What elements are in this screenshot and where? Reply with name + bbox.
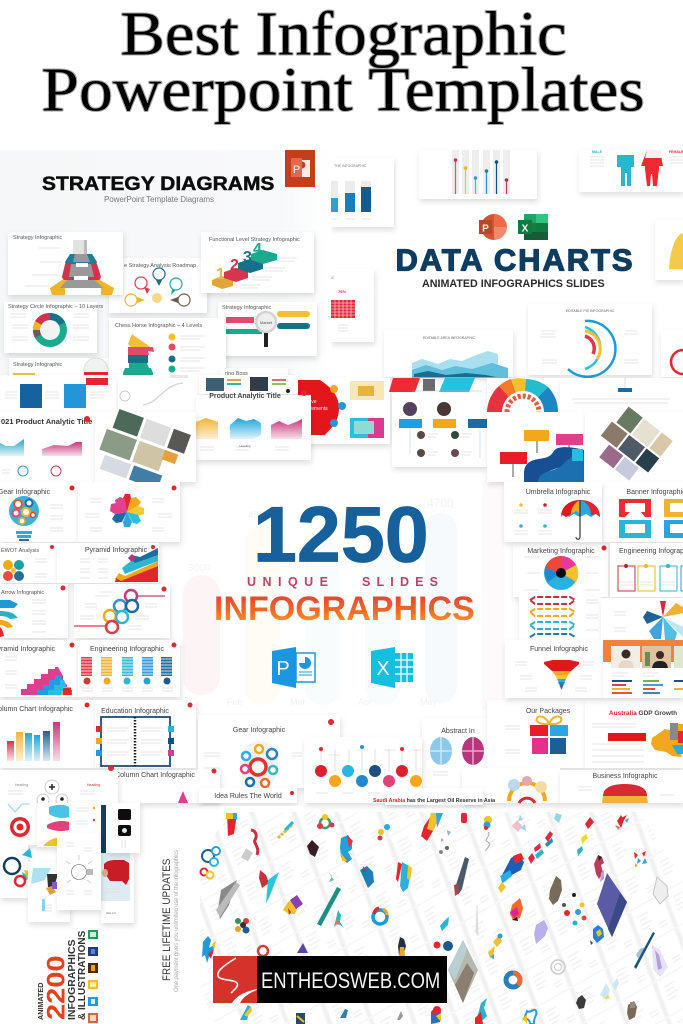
icon: powerpoint blue: P bbox=[276, 658, 290, 680]
card: petal wheel right bbox=[601, 598, 683, 640]
icon: excel blue bbox=[371, 647, 413, 688]
card: functional strategy steps bbox=[201, 232, 314, 293]
card: diamonds chain bbox=[519, 597, 601, 640]
card: red circle with photos bbox=[298, 378, 475, 444]
card: product analytic title bbox=[196, 390, 311, 460]
subheading: animated infographics slides: ANIMATED INFOGRAPHICS SLIDES bbox=[422, 278, 605, 290]
card: product analytic title: Product Analytic Title bbox=[209, 393, 281, 400]
card: coloured drops bbox=[37, 803, 72, 847]
card: bottom left cross: Heading bbox=[87, 783, 100, 787]
card: small legend bbox=[72, 803, 106, 833]
card: gear infographic head: Gear Infographic bbox=[233, 727, 286, 734]
subheading: unique slides: UNIQUE bbox=[247, 575, 328, 589]
card: functional strategy steps: 3 bbox=[243, 249, 252, 266]
card: column chart infographic bbox=[0, 700, 95, 768]
card: strategy pyramid: Strategy Infographic bbox=[13, 235, 62, 241]
card: funnel infographic: Funnel Infographic bbox=[530, 646, 588, 653]
card: saudi arabia oil reserve bbox=[373, 788, 495, 805]
heading: 1250: 1250 bbox=[253, 490, 429, 578]
watermark banner: entheosweb.com bbox=[213, 956, 447, 1003]
card: red pictogram grid: IC bbox=[331, 276, 335, 280]
card: area chart bbox=[384, 330, 513, 378]
card: bottom left cross: Heading bbox=[15, 783, 28, 787]
card: target bbox=[0, 803, 37, 845]
card: team photos bbox=[603, 640, 683, 698]
card: education notebook bbox=[95, 700, 196, 768]
icon: powerpoint square: P bbox=[293, 164, 300, 176]
text: one payment note rotated: One payment gives you unlimited use of the infographics bbox=[174, 850, 180, 992]
text: 2200 rotated: 2200 bbox=[41, 955, 70, 1020]
subheading: powerpoint template diagrams: PowerPoint Template Diagrams bbox=[104, 195, 214, 204]
card: road bbox=[487, 412, 585, 482]
icon: powerpoint circle logo: P bbox=[482, 224, 489, 234]
card: photo with red person bbox=[101, 853, 134, 923]
card: product analytic title: Heading bbox=[239, 444, 251, 448]
card: arrow infographic: Arrow Infographic bbox=[1, 590, 44, 596]
card: pyramid infographic bbox=[0, 640, 78, 697]
card: strategy circle: Strategy Circle Infographic – 10 Layers bbox=[8, 304, 103, 310]
icon: excel blue: X bbox=[376, 658, 390, 680]
title: Best Infographic bbox=[120, 0, 567, 68]
faint background bar chart: Feb bbox=[227, 697, 243, 707]
card: gear infographic head bbox=[198, 715, 340, 789]
app icons column bbox=[88, 930, 98, 1023]
card: our packages bbox=[487, 700, 585, 768]
card: puzzle arc bbox=[462, 768, 560, 803]
card: funnel infographic bbox=[505, 640, 603, 698]
heading: data charts: DATA CHARTS bbox=[396, 242, 632, 278]
card: arrow infographic bbox=[0, 584, 68, 638]
card: product title fragment bbox=[220, 368, 288, 378]
card: australia gdp growth bbox=[585, 700, 683, 768]
card: functional strategy steps: Functional Level Strategy Infographic bbox=[209, 237, 300, 243]
card: red pictogram grid: 76% bbox=[338, 289, 346, 294]
faint background bar chart: 4700 bbox=[427, 496, 454, 510]
card: male female figures bbox=[579, 150, 683, 192]
card: lower left column chart fragment: Column Chart Infographic bbox=[115, 772, 195, 779]
card: photos strip bbox=[199, 375, 298, 394]
card: strategy lower: Strategy Infographic bbox=[13, 362, 62, 368]
card: area chart: EDITABLE AREA INFOGRAPHIC bbox=[423, 336, 476, 340]
card: abstract infographic: Abstract In bbox=[441, 728, 475, 735]
card: business infographic: Business Infographic bbox=[593, 773, 658, 780]
card: red circle with photos: ative bbox=[306, 399, 317, 405]
icon: excel logo: X bbox=[522, 224, 529, 234]
card: donut arcs: EDITABLE PIE INFOGRAPHIC bbox=[566, 309, 615, 313]
card: petal wheel bbox=[78, 482, 180, 542]
card: chess horse bbox=[109, 318, 226, 378]
subheading: unique slides: SLIDES bbox=[362, 575, 438, 589]
card: circle chain bbox=[0, 845, 32, 898]
card: pyramid stripes: Pyramid Infographic bbox=[85, 547, 148, 554]
card: strategy roadmap bbox=[109, 258, 207, 313]
card: chess horse: Chess Horse Infographic – 4 Levels bbox=[115, 323, 202, 329]
slide thumbnails left bbox=[200, 813, 443, 1024]
card: strategy circle bbox=[4, 302, 103, 353]
card: abstract infographic bbox=[422, 718, 487, 788]
icon: powerpoint blue bbox=[272, 647, 315, 688]
card: strategy lower bbox=[9, 358, 109, 378]
card: engineering infographic springs: Engineering Infographic bbox=[90, 646, 164, 653]
card: org chart bbox=[392, 391, 487, 467]
card: lollipop chart bbox=[419, 150, 537, 199]
icon: powerpoint circle logo bbox=[479, 214, 507, 240]
card: 2021 product analytic bbox=[0, 412, 95, 482]
card: functional strategy steps: 1 bbox=[216, 266, 225, 283]
card: functional strategy steps: 2 bbox=[230, 257, 239, 274]
text: illustrations rotated: & ILLUSTRATIONS bbox=[77, 930, 88, 1020]
card: strategy magnifier: Market bbox=[260, 320, 273, 325]
card: strategy magnifier bbox=[218, 302, 317, 356]
collage: rotated photos left bbox=[93, 407, 196, 494]
heading: infographics: INFOGRAPHICS bbox=[214, 590, 475, 628]
panel: 1250 infographics collage bbox=[0, 375, 683, 806]
card: 3D column chart bbox=[331, 158, 394, 227]
card: marketing infographic bbox=[513, 543, 608, 597]
card: functional strategy steps: 4 bbox=[253, 241, 262, 258]
card: gear rainbow bbox=[487, 378, 560, 433]
card: strategy roadmap: e Strategy Analysis Roadmap bbox=[124, 263, 196, 269]
panel: strategy diagrams bbox=[0, 150, 331, 378]
card: umbrella infographic: Umbrella Infographic bbox=[526, 489, 591, 496]
card: gear infographic lightbulb bbox=[0, 482, 78, 542]
card: pyramid stripes bbox=[57, 543, 159, 583]
card: engineering infographic red-yellow tabs bbox=[610, 543, 683, 597]
card: idea rules the world: Idea Rules The World bbox=[214, 793, 282, 800]
card: swot analysis bbox=[0, 543, 57, 583]
card: engineering arrows bbox=[74, 584, 170, 638]
card: strategy pyramid bbox=[8, 232, 123, 295]
card: product title fragment: ring Boss bbox=[225, 371, 248, 377]
card: swot analysis: EWOT Analysis bbox=[1, 548, 39, 554]
card: bottom left cross bbox=[0, 765, 118, 806]
watermark banner: entheosweb.com: ENTHEOSWEB.COM bbox=[261, 968, 440, 993]
card: right text fragment bbox=[560, 378, 683, 412]
card: marketing infographic: Marketing Infographic bbox=[527, 548, 595, 555]
faint background bar chart: Mar bbox=[290, 697, 306, 707]
card: saudi arabia oil reserve: Saudi Arabia has the Largest Oil Reserve in Asia bbox=[373, 798, 495, 804]
faint background bar chart: 4500 bbox=[248, 510, 271, 521]
card: lightbulb bbox=[57, 833, 101, 910]
card: photo with red person: HELLO bbox=[106, 911, 117, 915]
text: animated rotated: ANIMATED bbox=[36, 983, 45, 1020]
faint background bar chart bbox=[183, 480, 504, 710]
card: donut arcs bbox=[528, 304, 652, 377]
card: 3D column chart: THE INFOGRAPHIC bbox=[334, 164, 367, 168]
card: right yellow chart bbox=[655, 220, 683, 280]
faint background bar chart: May bbox=[420, 697, 438, 707]
text: infographics rotated: INFOGRAPHICS bbox=[66, 939, 78, 1020]
card: engineering infographic springs bbox=[78, 640, 180, 697]
icon: excel logo bbox=[518, 214, 548, 240]
card: male female figures: MALE bbox=[592, 150, 603, 154]
title: Powerpoint Templates bbox=[41, 56, 645, 125]
faint background bar chart: Apr bbox=[358, 697, 372, 707]
card: wave line bbox=[118, 375, 206, 412]
card: idea rules the world bbox=[199, 788, 297, 803]
card: right red arc bbox=[661, 330, 683, 377]
card: hexagon timeline bbox=[304, 737, 422, 803]
card: education notebook: Education Infographic bbox=[101, 708, 169, 715]
card: male female figures: FEMALE bbox=[669, 150, 683, 154]
slide thumbnails right bbox=[433, 813, 668, 1024]
panel: data charts background cards bbox=[331, 150, 683, 378]
collage: rotated photos right bbox=[585, 404, 683, 487]
card: red pictogram grid bbox=[331, 269, 374, 342]
card: red circle with photos: evements bbox=[306, 406, 328, 412]
text: free lifetime updates rotated: FREE LIFETIME UPDATES bbox=[160, 859, 173, 981]
faint background bar chart: 3000 bbox=[188, 563, 211, 574]
title bbox=[41, 0, 645, 125]
card: australia gdp growth: Australia GDP Growth bbox=[609, 710, 677, 717]
card: dark strip with black icons bbox=[101, 803, 140, 853]
icon: powerpoint square bbox=[285, 150, 315, 187]
card: lower left column chart fragment bbox=[115, 768, 220, 803]
card: rear lower bbox=[28, 862, 70, 922]
card: umbrella infographic bbox=[504, 482, 602, 542]
card: 2021 product analytic: 021 Product Analytic Title bbox=[1, 417, 92, 426]
card: table fragment bbox=[0, 375, 118, 412]
card: business infographic bbox=[560, 770, 683, 803]
card: our packages: Our Packages bbox=[526, 708, 571, 715]
card: strategy magnifier: Strategy Infographic bbox=[222, 305, 271, 311]
panel: animated 2200 infographics bbox=[0, 803, 180, 1023]
card: banner infographic bbox=[602, 482, 683, 542]
heading: strategy diagrams: STRATEGY DIAGRAMS bbox=[42, 174, 274, 195]
panel: isometric slides grid bbox=[200, 812, 683, 1024]
